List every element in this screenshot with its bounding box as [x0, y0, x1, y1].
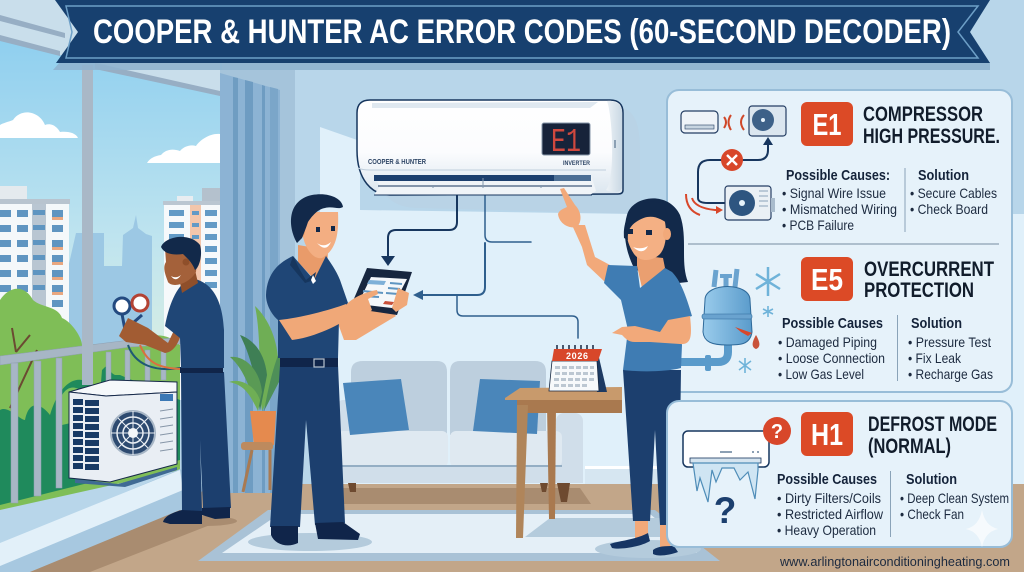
solution E5: Solution: [911, 315, 962, 332]
face: [164, 248, 198, 285]
causes E5: [778, 315, 885, 382]
solution H1: [900, 471, 1009, 522]
hand behind tablet: [392, 288, 409, 312]
person shadows: [248, 533, 372, 551]
causes H1: • Dirty Filters/Coils: [777, 490, 881, 506]
man with tablet: [266, 194, 412, 545]
hair: [161, 237, 201, 270]
ceiling frame beams: [0, 0, 220, 96]
lower arm: [612, 316, 691, 344]
tablet: [350, 268, 412, 315]
neck: [298, 245, 328, 280]
panel: error code cards E1 and E5: [667, 90, 1012, 392]
causes E1: Possible Causes:: [786, 167, 890, 184]
causes E1: [782, 167, 897, 233]
E1 section: [681, 102, 1000, 233]
curtain: [220, 70, 295, 493]
apartment building left: [0, 186, 70, 400]
solution E5: [908, 315, 993, 382]
window post: [82, 65, 93, 385]
shoes: [163, 507, 230, 524]
panel: H1 card: [667, 401, 1012, 547]
balcony ledge: [0, 469, 210, 572]
badge E1: [801, 102, 853, 146]
ear: [182, 258, 190, 266]
floor: [30, 466, 1024, 572]
near forearm: [279, 304, 352, 340]
legs: [270, 365, 345, 527]
pants: [623, 370, 681, 525]
ear: [663, 228, 671, 240]
shoes: [610, 533, 678, 555]
E5 section: [670, 257, 994, 382]
technician: [114, 237, 237, 526]
causes E5: Possible Causes: [782, 315, 883, 332]
ear: [295, 224, 305, 238]
badge H1: H1: [811, 417, 843, 452]
causes H1: • Restricted Airflow: [777, 506, 884, 522]
solution H1: Solution: [906, 471, 957, 488]
smile: [317, 242, 331, 248]
heading H1: [868, 413, 997, 458]
icon: frozen indoor unit: ?: [714, 490, 736, 531]
neck: [637, 255, 665, 288]
heading E5: OVERCURRENT: [864, 258, 994, 281]
belt: [280, 358, 338, 367]
icon: frozen indoor unit: [683, 417, 791, 531]
base: [337, 466, 583, 483]
table shadow on rug: [525, 518, 665, 537]
calendar year: 2026: [566, 351, 588, 361]
woman pointing: [558, 188, 692, 555]
hair back: [625, 198, 688, 285]
causes H1: [777, 471, 884, 538]
solution H1: • Check Fan: [900, 506, 964, 522]
floor shadow: [335, 488, 591, 504]
smile: [633, 246, 648, 251]
eyes: [316, 226, 335, 232]
icon: frozen indoor unit: ?: [771, 421, 783, 443]
plant on stool: [229, 306, 280, 492]
face: [626, 208, 666, 260]
air conditioner indoor unit: [357, 100, 623, 195]
face: [302, 212, 338, 258]
skyline: [68, 215, 152, 400]
eyes: [628, 229, 652, 235]
cloud right: [147, 134, 220, 163]
ankles: [635, 521, 672, 548]
hair: [291, 194, 343, 243]
arms: [337, 400, 357, 460]
belt: [180, 367, 223, 373]
vent: [373, 175, 596, 195]
balcony railing: [0, 338, 180, 503]
second arm: [336, 304, 396, 340]
solution E1: • Check Board: [910, 201, 988, 217]
hair front: [624, 202, 670, 240]
heading E5: PROTECTION: [864, 279, 974, 302]
green foliage: [0, 289, 180, 510]
causes E5: • Damaged Piping: [778, 334, 877, 350]
heading E1: COMPRESSOR: [863, 103, 983, 126]
outdoor condenser unit: [69, 380, 177, 487]
website url: www.arlingtonairconditioningheating.com: [779, 555, 1010, 569]
title banner: [53, 0, 990, 70]
raised arm: [572, 225, 610, 283]
legs: [181, 372, 231, 512]
back cushions: [351, 361, 447, 435]
badge H1: [801, 412, 853, 456]
causes H1: • Heavy Operation: [777, 522, 876, 538]
causes E5: • Low Gas Level: [778, 366, 864, 382]
rug: [198, 510, 720, 561]
error display: E1: [551, 124, 581, 161]
solution E5: • Fix Leak: [908, 350, 962, 366]
badge E5: E5: [811, 262, 843, 297]
brand label: COOPER & HUNTER: [368, 159, 426, 166]
solution E1: • Secure Cables: [910, 185, 997, 201]
wall light patch: [320, 127, 1024, 490]
shoes: [271, 522, 360, 545]
causes E1: • Mismatched Wiring: [782, 201, 897, 217]
hand on tablet: [346, 290, 378, 317]
causes E5: • Loose Connection: [778, 350, 885, 366]
calendar: [549, 345, 607, 392]
neck: [178, 270, 198, 293]
solution E5: • Pressure Test: [908, 334, 991, 350]
sparkle watermark: [966, 510, 998, 547]
icon: wiring diagram: [681, 106, 786, 220]
inverter label: INVERTER: [563, 160, 590, 167]
solution E5: • Recharge Gas: [908, 366, 993, 382]
heading E5: [864, 258, 994, 302]
connector lines: [381, 195, 578, 338]
badge E5: [801, 257, 853, 301]
causes E1: • PCB Failure: [782, 217, 854, 233]
solution E1: Solution: [918, 167, 969, 184]
table: [505, 387, 622, 538]
air conditioner wall shadow: [385, 108, 640, 214]
blue pillows: [343, 379, 409, 435]
cloud left: [0, 112, 78, 138]
causes H1: Possible Causes: [777, 471, 877, 488]
shirt: [266, 256, 348, 358]
apartment building right: [163, 188, 220, 400]
sofa: [335, 361, 591, 504]
gauges and hoses: [114, 295, 180, 369]
smile: [171, 275, 181, 279]
hand: [558, 188, 581, 227]
causes E1: • Signal Wire Issue: [782, 185, 886, 201]
legs: [348, 483, 570, 502]
heading E1: [863, 103, 1000, 148]
shirt: [165, 278, 224, 368]
solution E1: [910, 167, 997, 217]
icon: refrigerant tank leak: [670, 267, 780, 373]
shirt: [604, 265, 692, 371]
window view: [0, 0, 222, 510]
badge E1: E1: [812, 107, 842, 142]
arm: [119, 318, 182, 353]
floor shadow: [173, 516, 237, 526]
heading H1: (NORMAL): [868, 435, 951, 458]
seat cushions: [337, 431, 448, 467]
